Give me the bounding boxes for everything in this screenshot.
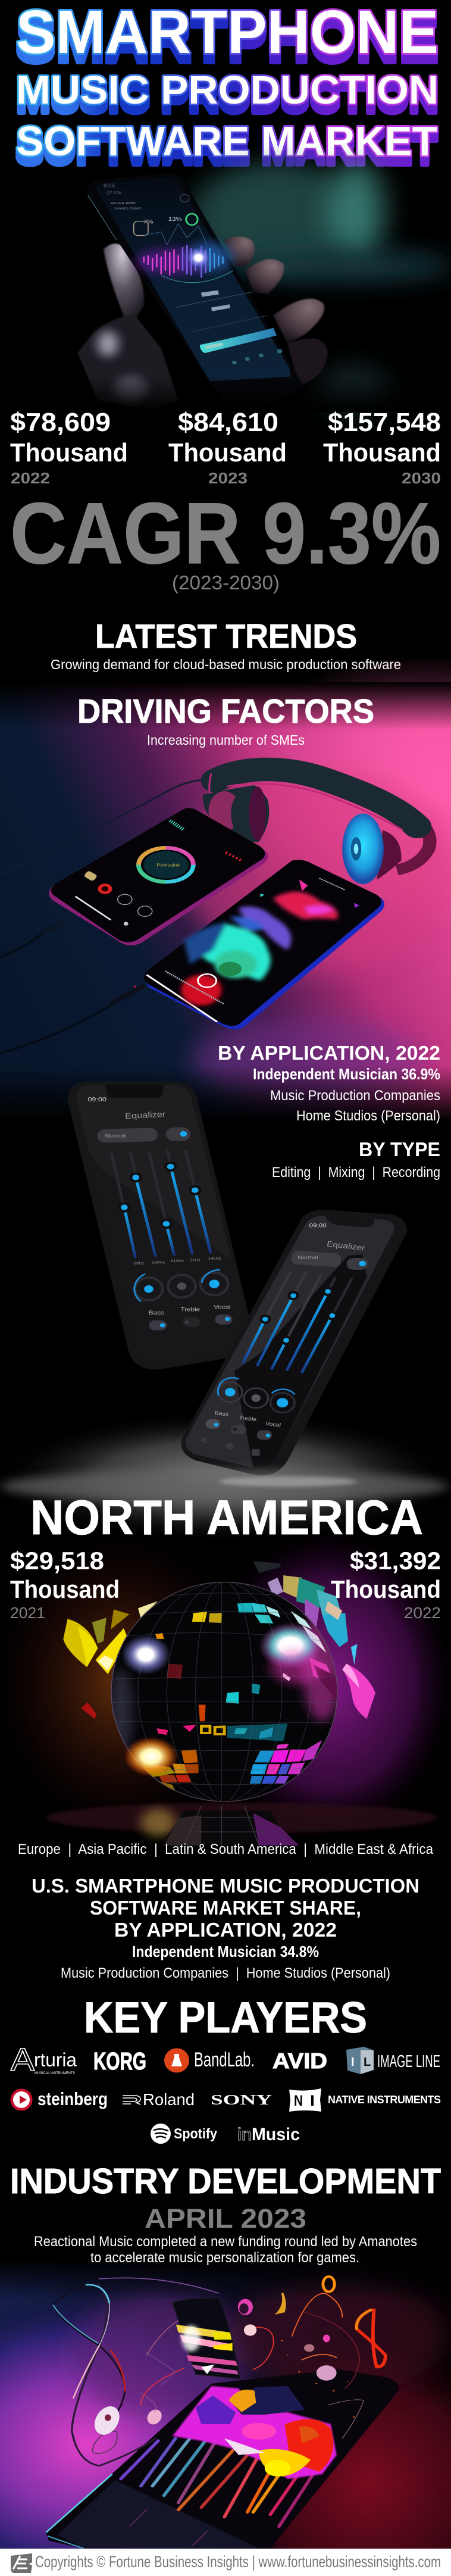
- logo: inMusic: Music: [252, 2125, 300, 2144]
- logos: [11, 2042, 441, 2144]
- phone: front equalizer: Equalizer: [125, 1110, 166, 1121]
- logo: BandLab: [164, 2048, 255, 2073]
- phone: back equalizer: Bass: [214, 1410, 229, 1417]
- phone: front equalizer: 60Hz: [134, 1262, 145, 1266]
- highlights: [121, 1622, 322, 1776]
- logo: inMusic: in: [237, 2125, 252, 2144]
- U.S. market share: U.S. SMARTPHONE MUSIC PRODUCTION: [32, 1875, 419, 1897]
- icon: Fortune Business Insights: [11, 2553, 32, 2573]
- logo: BandLab: BandLab.: [194, 2049, 255, 2071]
- phone screen ui: Q7 POL: [107, 192, 122, 195]
- by application heading: BY APPLICATION, 2022: [218, 1042, 440, 1064]
- sparks: [281, 2340, 355, 2418]
- stat 2022: [10, 408, 128, 487]
- value 2022: $31,392: [350, 1547, 441, 1575]
- phone screen ui: 7%: [143, 219, 154, 225]
- logo: Image Line: L: [364, 2056, 371, 2069]
- phone body: [87, 173, 305, 419]
- phone screen ui: 13%: [168, 216, 183, 223]
- value 2021: 2021: [10, 1604, 45, 1622]
- value 2021: $29,518: [10, 1547, 104, 1575]
- phone: dark player: PoMusiné: [156, 863, 180, 867]
- latest trends: [51, 617, 401, 672]
- logo: Steinberg: [11, 2088, 108, 2111]
- logo: Arturia: MUSICAL INSTRUMENTS: [35, 2072, 75, 2075]
- fade to black: [0, 377, 451, 412]
- treble clef ribbon: [53, 2278, 218, 2466]
- driving factors: [77, 692, 374, 748]
- pink background: [0, 655, 451, 1120]
- north america: NORTH AMERICA: [30, 1491, 423, 1545]
- smartphone: [46, 2369, 399, 2549]
- phone: dark player: [49, 808, 268, 945]
- side glows on ball: [302, 1608, 342, 1721]
- stat 2023: Thousand: [168, 438, 287, 467]
- phone: colourful splash: [144, 860, 384, 1029]
- driving factors: DRIVING FACTORS: [77, 692, 374, 730]
- value 2022: Thousand: [331, 1575, 441, 1603]
- floating notes and strokes: [141, 2293, 386, 2438]
- logo: Spotify: [151, 2124, 218, 2144]
- logo: Image Line: [346, 2047, 440, 2074]
- title: SOFTWARE MARKET: [16, 118, 437, 164]
- waveform: [135, 242, 233, 278]
- value 2022: [331, 1547, 441, 1622]
- phone: back equalizer: Treble: [239, 1415, 257, 1423]
- phone: back equalizer: Normal: [297, 1255, 318, 1261]
- stats: market values: [10, 408, 441, 487]
- logo: Native Instruments: NATIVE INSTRUMENTS: [328, 2094, 441, 2106]
- stat 2030: $157,548: [328, 408, 441, 437]
- title: [16, 0, 439, 164]
- phone: back equalizer: [181, 1210, 407, 1475]
- phone: front equalizer: Vocal: [214, 1304, 231, 1310]
- phone screen ui: [104, 183, 282, 364]
- stat 2030: 2030: [402, 469, 441, 487]
- U.S. market share: BY APPLICATION, 2022: [114, 1919, 337, 1941]
- value 2021: [10, 1547, 120, 1622]
- value 2021: Thousand: [10, 1575, 120, 1603]
- logo: Roland: Roland: [143, 2090, 195, 2109]
- industry development: INDUSTRY DEVELOPMENT: [10, 2162, 441, 2201]
- by type heading: BY TYPE: [359, 1138, 440, 1160]
- U.S. market share: SOFTWARE MARKET SHARE,: [90, 1897, 361, 1919]
- stat 2023: 2023: [208, 469, 248, 487]
- logo: Native Instruments: N: [294, 2093, 303, 2109]
- phone: front equalizer: 230Hz: [152, 1261, 165, 1264]
- dials: [134, 1270, 228, 1301]
- north america: [10, 1491, 441, 1622]
- phone: front equalizer: 3kHz: [190, 1259, 201, 1262]
- illustration: hand holding phone with music app: [0, 160, 451, 419]
- stat 2023: $84,610: [178, 408, 278, 437]
- grid: [111, 1582, 338, 1802]
- floor light over top continuation: [0, 1470, 449, 1503]
- key players heading: KEY PLAYERS: [84, 1994, 367, 2042]
- colour cloud: [173, 2386, 337, 2479]
- headphones: [203, 769, 430, 884]
- phone screen ui: JHAHIS CHIAS: [114, 207, 142, 211]
- value 2022: 2022: [404, 1604, 441, 1622]
- phone: front equalizer: Bass: [149, 1310, 164, 1316]
- rainbow ring: [139, 848, 193, 882]
- logo: Sony: SONY: [211, 2093, 272, 2108]
- stat 2030: Thousand: [323, 438, 441, 467]
- phone screen ui: 9:03: [104, 183, 115, 188]
- phone: front equalizer: Treble: [181, 1306, 200, 1313]
- phone: back equalizer: 09:00: [309, 1223, 327, 1229]
- illustration: exploding phone and music notes: [0, 2260, 451, 2576]
- art background: [0, 2260, 451, 2576]
- stat 2022: 2022: [11, 469, 50, 487]
- stat 2022: Thousand: [10, 438, 128, 467]
- stat 2022: $78,609: [10, 408, 111, 437]
- logo: Arturia: [11, 2042, 77, 2078]
- industry development: [10, 2162, 441, 2266]
- industry development: APRIL 2023: [145, 2203, 306, 2234]
- logo: Spotify: Spotify: [174, 2126, 218, 2142]
- CAGR: (2023-2030): [172, 572, 280, 594]
- logo: Native Instruments: [289, 2088, 441, 2112]
- logo: Steinberg: steinberg: [37, 2088, 108, 2109]
- phone: back equalizer: Equalizer: [326, 1239, 366, 1252]
- panel: application and type text: [218, 1042, 440, 1181]
- phone: front equalizer: 09:00: [87, 1097, 107, 1103]
- application other segments: [270, 1088, 440, 1124]
- fingers: [78, 236, 328, 410]
- phone: front equalizer: 14kHz: [208, 1257, 221, 1261]
- phone: front equalizer: 910Hz: [171, 1260, 184, 1263]
- phone: back equalizer: Vocal: [265, 1421, 281, 1428]
- logo: Avid: AVID: [273, 2049, 327, 2073]
- latest trends: Growing demand for cloud-based music production software: [51, 657, 401, 672]
- teal background glow: [190, 160, 451, 419]
- phone: front equalizer: Normal: [105, 1133, 126, 1139]
- footer: [0, 2549, 451, 2576]
- paint streaks: [121, 2436, 320, 2546]
- stat 2023: [168, 408, 287, 487]
- disc note: [90, 2393, 164, 2438]
- U.S. market share: Music Production Companies | Home Studios (Personal): [61, 1965, 390, 1981]
- illustration: equalizer phones: [0, 1082, 451, 1543]
- title: MUSIC PRODUCTION: [16, 68, 439, 113]
- music sheet note: [173, 2298, 240, 2379]
- industry development: Reactional Music completed a new funding round led by Amanotes: [34, 2234, 417, 2250]
- floor reflection: [46, 1803, 437, 1846]
- U.S. market share: Independent Musician 34.8%: [132, 1943, 319, 1960]
- coloured tiles: [141, 1603, 338, 1792]
- logo: Native Instruments: I: [310, 2093, 315, 2109]
- cables: [0, 779, 207, 1054]
- panel: driving factors image: [0, 655, 451, 1120]
- phone: front equalizer: [68, 1082, 254, 1369]
- logo: KORG: KORG: [93, 2047, 146, 2075]
- controls: [98, 883, 112, 894]
- sliders: [112, 1151, 211, 1257]
- illustration: disco ball: [0, 1533, 451, 1846]
- driving factors: Increasing number of SMEs: [147, 732, 305, 748]
- industry development: to accelerate music personalization for games.: [90, 2250, 359, 2266]
- mirror ball: [109, 1582, 342, 1802]
- latest trends: LATEST TRENDS: [95, 617, 357, 655]
- shards: [63, 1561, 375, 1719]
- logo: Image Line: I: [351, 2056, 355, 2069]
- phone screen ui: REVER IRMS: [111, 202, 136, 205]
- stat 2030: [323, 408, 441, 487]
- glow: [0, 1533, 451, 1834]
- application other segments: Music Production Companies: [270, 1088, 440, 1104]
- floor light: [0, 1411, 451, 1543]
- logo: Arturia: rturia: [34, 2049, 77, 2071]
- U.S. market share: [32, 1875, 419, 1981]
- confetti: [268, 1575, 348, 1647]
- logo: Arturia: A: [11, 2042, 35, 2078]
